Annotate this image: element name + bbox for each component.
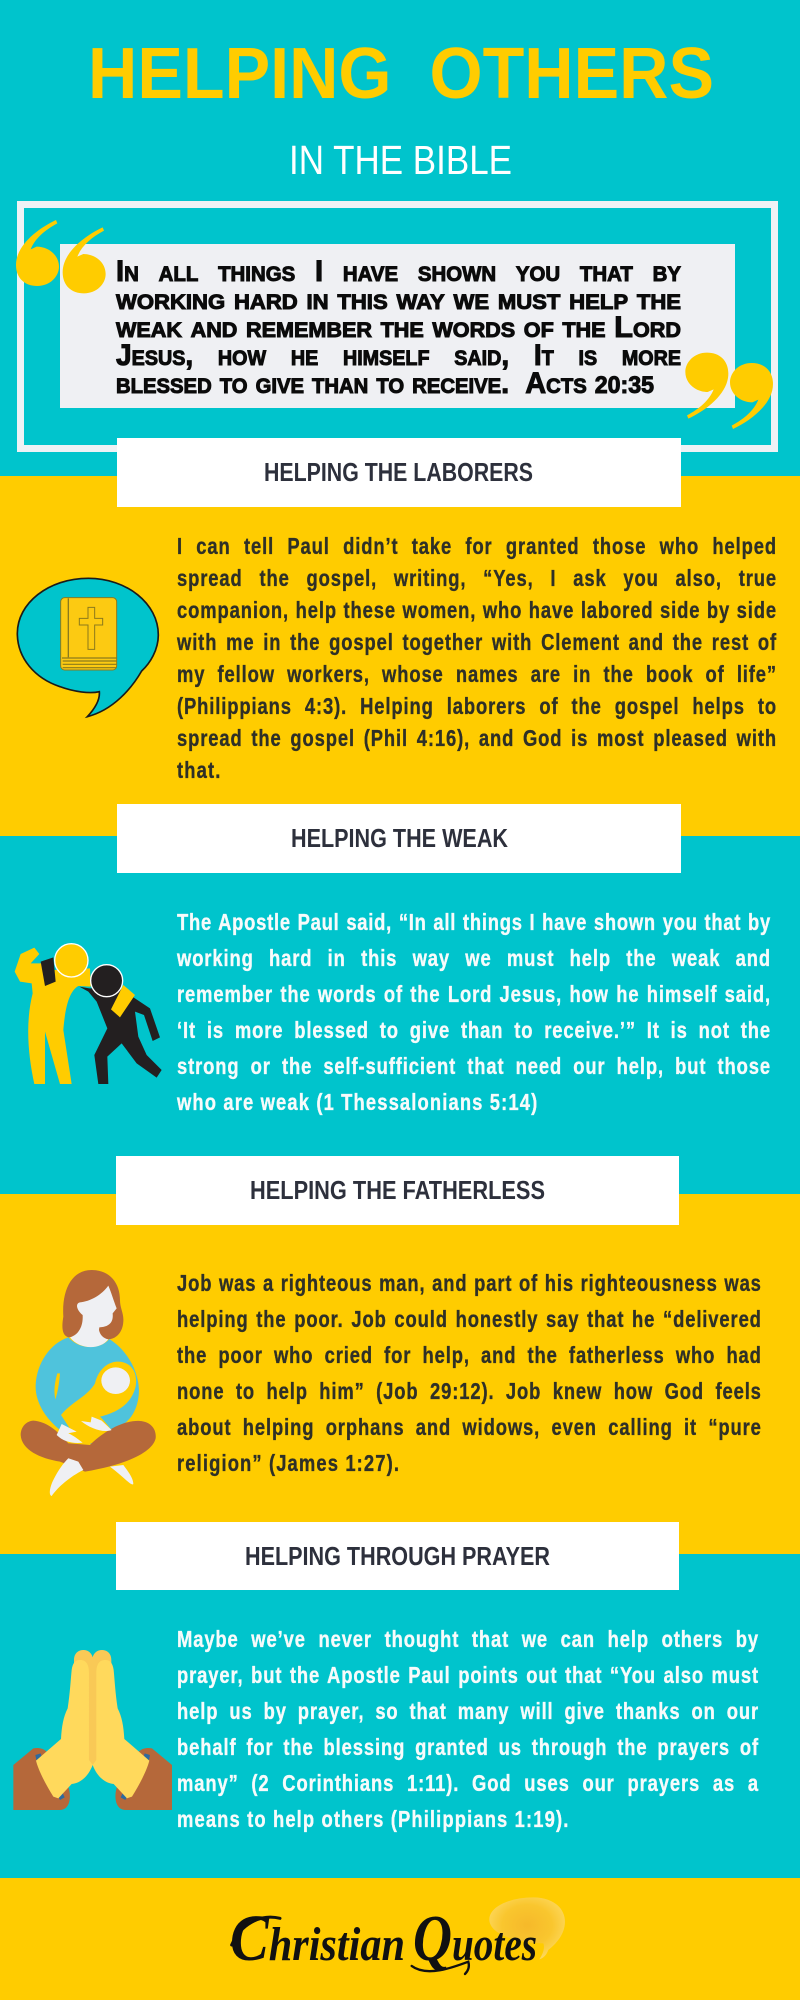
heading: helping the weak: HELPING THE WEAK <box>291 823 508 853</box>
body text: laborers <box>176 532 777 782</box>
body text: weak: who are weak (1 Thessalonians 5:14) <box>177 1089 538 1115</box>
logo: christian quotes: Quotes <box>413 1902 537 1975</box>
body text: fatherless: about helping orphans and widows, even calling it “pure <box>177 1414 762 1440</box>
heading: helping through prayer: HELPING THROUGH PRAYER <box>245 1541 550 1571</box>
body text: prayer: help us by prayer, so that many will give thanks on our <box>177 1698 759 1724</box>
heading: helping the laborers: HELPING THE LABORERS <box>264 457 533 487</box>
quote text <box>115 255 682 400</box>
body text: prayer: behalf for the blessing granted us through the prayers of <box>177 1734 759 1760</box>
heading: helping the weak <box>117 804 681 873</box>
closing quotation mark icon <box>685 352 773 429</box>
band: yellow footer <box>0 1878 800 2000</box>
body text: fatherless <box>177 1270 762 1476</box>
body text: laborers: spread the gospel (Phil 4:16), and God is most pleased with <box>177 724 777 750</box>
body text: laborers: I can tell Paul didn’t take for granted those who helped <box>177 532 777 558</box>
logo: christian quotes: Christian <box>230 1902 405 1975</box>
body text: laborers: spread the gospel, writing, “Yes, I ask you also, true <box>177 564 777 590</box>
body text: weak: The Apostle Paul said, “In all things I have shown you that by <box>177 909 771 935</box>
heading: helping the laborers <box>117 438 681 507</box>
title: HELPING OTHERS <box>88 34 714 114</box>
body text: fatherless: helping the poor. Job could honestly say that he “delivered <box>177 1306 762 1332</box>
body text: laborers: with me in the gospel together with Clement and the rest of <box>177 628 777 654</box>
icon: speech bubble with bible <box>16 578 160 718</box>
body text: weak: ‘It is more blessed to give than to receive.’” It is not the <box>177 1017 771 1043</box>
quote text: working hard in this way we must help the <box>116 283 681 316</box>
body text: weak <box>176 909 771 1116</box>
body text: laborers: companion, help these women, who have labored side by side <box>177 596 777 622</box>
opening quotation mark icon <box>16 220 106 294</box>
body text: prayer: Maybe we’ve never thought that we can help others by <box>177 1626 759 1652</box>
icon: person supporting weak person <box>14 943 162 1084</box>
band: yellow fatherless section <box>0 1194 800 1554</box>
heading: helping the fatherless: HELPING THE FATHERLESS <box>250 1175 545 1205</box>
body text: prayer: many” (2 Corinthians 1:11). God uses our prayers as a <box>177 1770 759 1796</box>
body text: prayer <box>177 1626 759 1832</box>
body text: prayer: prayer, but the Apostle Paul points out that “You also must <box>177 1662 759 1688</box>
body text: prayer: means to help others (Philippians 1:19). <box>177 1806 569 1832</box>
quote text: In all things I have shown you that by <box>116 255 681 288</box>
quote text: weak and remember the words of the Lord <box>116 311 681 344</box>
quote frame <box>17 201 778 452</box>
body text: fatherless: Job was a righteous man, and part of his righteousness was <box>177 1270 762 1296</box>
body text: fatherless: religion” (James 1:27). <box>177 1450 400 1476</box>
body text: weak: working hard in this way we must help the weak and <box>177 945 771 971</box>
band: yellow laborers section <box>0 476 800 836</box>
heading: helping through prayer <box>116 1522 679 1590</box>
body text: fatherless: the poor who cried for help, and the fatherless who had <box>177 1342 762 1368</box>
icon: mother holding baby <box>20 1270 156 1496</box>
subtitle: IN THE BIBLE <box>289 137 512 183</box>
quote text: blessed to give than to receive. Acts 20:35 <box>116 367 654 400</box>
body text: weak: remember the words of the Lord Jesus, how he himself said, <box>177 981 771 1007</box>
heading: helping the fatherless <box>116 1156 679 1225</box>
body text: laborers: (Philippians 4:3). Helping laborers of the gospel helps to <box>177 692 777 718</box>
quote box <box>60 244 735 408</box>
body text: weak: strong or the self-sufficient that need our help, but those <box>177 1053 771 1079</box>
body text: laborers: my fellow workers, whose names are in the book of life” <box>177 660 777 686</box>
quote text: Jesus, how he himself said, It is more <box>116 339 681 372</box>
body text: fatherless: none to help him” (Job 29:12). Job knew how God feels <box>177 1378 762 1404</box>
body text: laborers: that. <box>177 756 221 782</box>
